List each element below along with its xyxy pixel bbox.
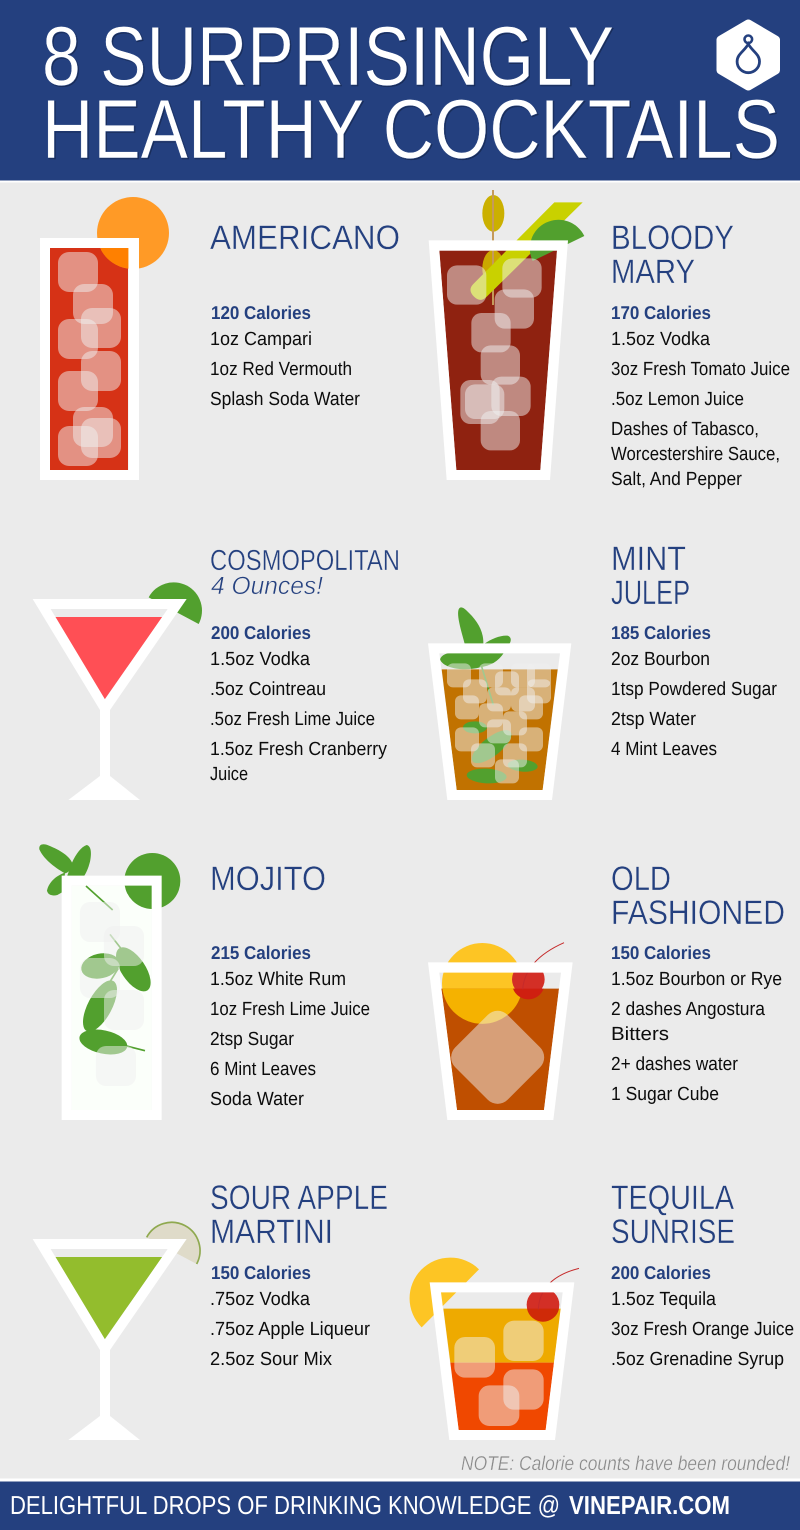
recipe: Mojito: 1oz Fresh Lime Juice [210,999,370,1020]
recipe: Mint Julep [611,540,778,760]
recipe: Bloody Mary: 170 Calories [611,302,711,323]
illustration: Mojito glass [39,844,180,1120]
recipe: Mint Julep: JULEP [611,574,690,612]
recipe: Bloody Mary: 1.5oz Vodka [611,329,710,350]
recipe: Cosmopolitan: .5oz Fresh Lime Juice [210,709,375,730]
recipe: Cosmopolitan: COSMOPOLITAN [210,545,400,577]
recipe: Tequila Sunrise: 1.5oz Tequila [611,1289,716,1310]
illustration: Sour Apple Martini glass [33,1222,200,1440]
recipe: Americano: 120 Calories [211,302,311,323]
recipe: Mojito: 1.5oz White Rum [210,969,346,990]
recipe: Cosmopolitan: 4 Ounces! [211,572,323,600]
illustration: Cosmopolitan glass [33,582,202,800]
recipe: Sour Apple Martini: .75oz Apple Liqueur [210,1319,371,1340]
recipe: Sour Apple Martini: 150 Calories [211,1262,311,1283]
recipe: Tequila Sunrise: 200 Calories [611,1262,711,1283]
recipe: Old Fashioned [611,860,785,1105]
recipe: Mint Julep: 185 Calories [611,622,711,643]
recipe: Cosmopolitan: 1.5oz Vodka [210,649,310,670]
recipe: Mojito: MOJITO [210,860,326,898]
recipe: Bloody Mary [611,219,790,490]
recipe: Americano: AMERICANO [210,219,400,257]
recipe: Americano [210,219,400,410]
recipe: Mojito: 2tsp Sugar [210,1029,295,1050]
recipe: Americano: Splash Soda Water [210,389,361,410]
recipe: Mojito: Soda Water [210,1089,305,1110]
recipe: Mint Julep: 4 Mint Leaves [611,739,717,760]
recipe: Bloody Mary: BLOODY [611,219,734,257]
recipe: Tequila Sunrise: .5oz Grenadine Syrup [611,1349,784,1370]
footer banner: VINEPAIR.COM [569,1490,730,1520]
recipe: Bloody Mary: MARY [611,253,695,291]
recipe: Cosmopolitan [210,545,400,785]
recipe: Bloody Mary: Salt, And Pepper [611,469,743,490]
recipe: Mojito: 6 Mint Leaves [210,1059,316,1080]
recipe: Cosmopolitan: Juice [210,764,248,785]
footer banner: DELIGHTFUL DROPS OF DRINKING KNOWLEDGE @ [10,1490,560,1520]
recipe: Mojito [210,860,370,1110]
illustration: Tequila Sunrise glass [410,1258,579,1440]
footer banner [0,1478,800,1530]
recipe: Bloody Mary: Worcestershire Sauce, [611,444,780,465]
recipe: Old Fashioned: 150 Calories [611,942,711,963]
recipe: Mojito: 215 Calories [211,942,311,963]
recipe: Bloody Mary: .5oz Lemon Juice [611,389,744,410]
recipe: Old Fashioned: Bitters [611,1024,669,1045]
illustration: Mint Julep glass [428,607,571,800]
recipe: Americano: 1oz Campari [210,329,312,350]
recipe: Tequila Sunrise [611,1179,794,1370]
recipe: Cosmopolitan: 200 Calories [211,622,311,643]
recipe: Old Fashioned: 2+ dashes water [611,1054,739,1075]
recipe: Old Fashioned: 1.5oz Bourbon or Rye [611,969,782,990]
recipe: Cosmopolitan: 1.5oz Fresh Cranberry [210,739,387,760]
icon: VinePair hexagon drop logo [721,24,776,86]
title: 8 SURPRISINGLY [42,9,614,103]
title [42,9,780,176]
recipe: Old Fashioned: 1 Sugar Cube [611,1084,719,1105]
recipe: Americano: 1oz Red Vermouth [210,359,352,380]
illustration: Old Fashioned glass [428,943,573,1120]
recipe: Cosmopolitan: .5oz Cointreau [210,679,326,700]
recipe: Old Fashioned: 2 dashes Angostura [611,999,765,1020]
recipe: Bloody Mary: Dashes of Tabasco, [611,419,759,440]
recipe: Mint Julep: 1tsp Powdered Sugar [611,679,778,700]
recipe: Sour Apple Martini: .75oz Vodka [210,1289,310,1310]
recipe: Sour Apple Martini: SOUR APPLE [210,1179,388,1217]
header banner [0,0,800,182]
recipe: Sour Apple Martini: MARTINI [210,1213,333,1251]
illustration: Bloody Mary glass [429,190,584,480]
recipe: Tequila Sunrise: TEQUILA [611,1179,734,1217]
recipe: Mint Julep: MINT [611,540,686,578]
recipe: Mint Julep: 2oz Bourbon [611,649,710,670]
recipe: Mint Julep: 2tsp Water [611,709,697,730]
illustration: Americano glass [40,197,169,480]
recipe: Tequila Sunrise: SUNRISE [611,1213,735,1251]
recipe: Sour Apple Martini [210,1179,388,1370]
recipe: Sour Apple Martini: 2.5oz Sour Mix [210,1349,332,1370]
recipe: Old Fashioned: OLD [611,860,671,898]
